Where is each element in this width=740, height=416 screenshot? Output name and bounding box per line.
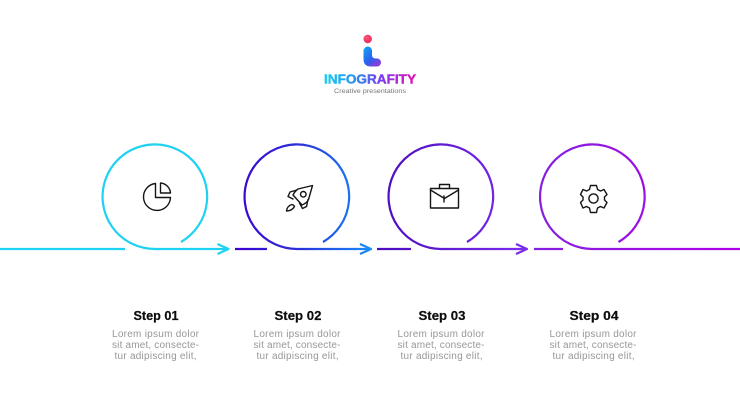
icon: gear [580, 186, 607, 212]
step 3 track [377, 144, 527, 254]
step 2 track [235, 144, 371, 254]
step 4 description: tur adipiscing elit, [552, 351, 634, 362]
step 2 description: tur adipiscing elit, [256, 351, 338, 362]
step 1 description: tur adipiscing elit, [114, 351, 196, 362]
step 1 heading: Step 01 [134, 308, 178, 323]
icon: briefcase [430, 184, 458, 208]
icon: rocket [286, 186, 312, 211]
step 1 description: Lorem ipsum dolor [112, 329, 200, 340]
step 4 description: sit amet, consecte- [550, 340, 636, 351]
step 2 text [254, 308, 341, 362]
logo tagline: Creative presentations [334, 88, 407, 95]
step 3 text [398, 308, 485, 362]
logo [324, 35, 416, 95]
logo icon [364, 35, 381, 66]
step 4 heading: Step 04 [570, 308, 619, 323]
icon: pie chart [144, 183, 170, 210]
step 3 description: Lorem ipsum dolor [398, 329, 485, 340]
step 1 description: sit amet, consecte- [112, 340, 199, 351]
step 2 description: Lorem ipsum dolor [254, 329, 341, 340]
step 3 description: sit amet, consecte- [398, 340, 484, 351]
step 4 text [550, 308, 637, 362]
step 4 track [534, 144, 740, 249]
step 1 text [112, 308, 200, 362]
step 2 heading: Step 02 [274, 308, 322, 323]
step 2 description: sit amet, consecte- [254, 340, 340, 351]
step 4 description: Lorem ipsum dolor [550, 329, 637, 340]
logo wordmark: INFOGRAFITY [324, 72, 416, 86]
step 3 heading: Step 03 [418, 308, 466, 323]
step 1 track [0, 144, 228, 254]
step 3 description: tur adipiscing elit, [400, 351, 482, 362]
